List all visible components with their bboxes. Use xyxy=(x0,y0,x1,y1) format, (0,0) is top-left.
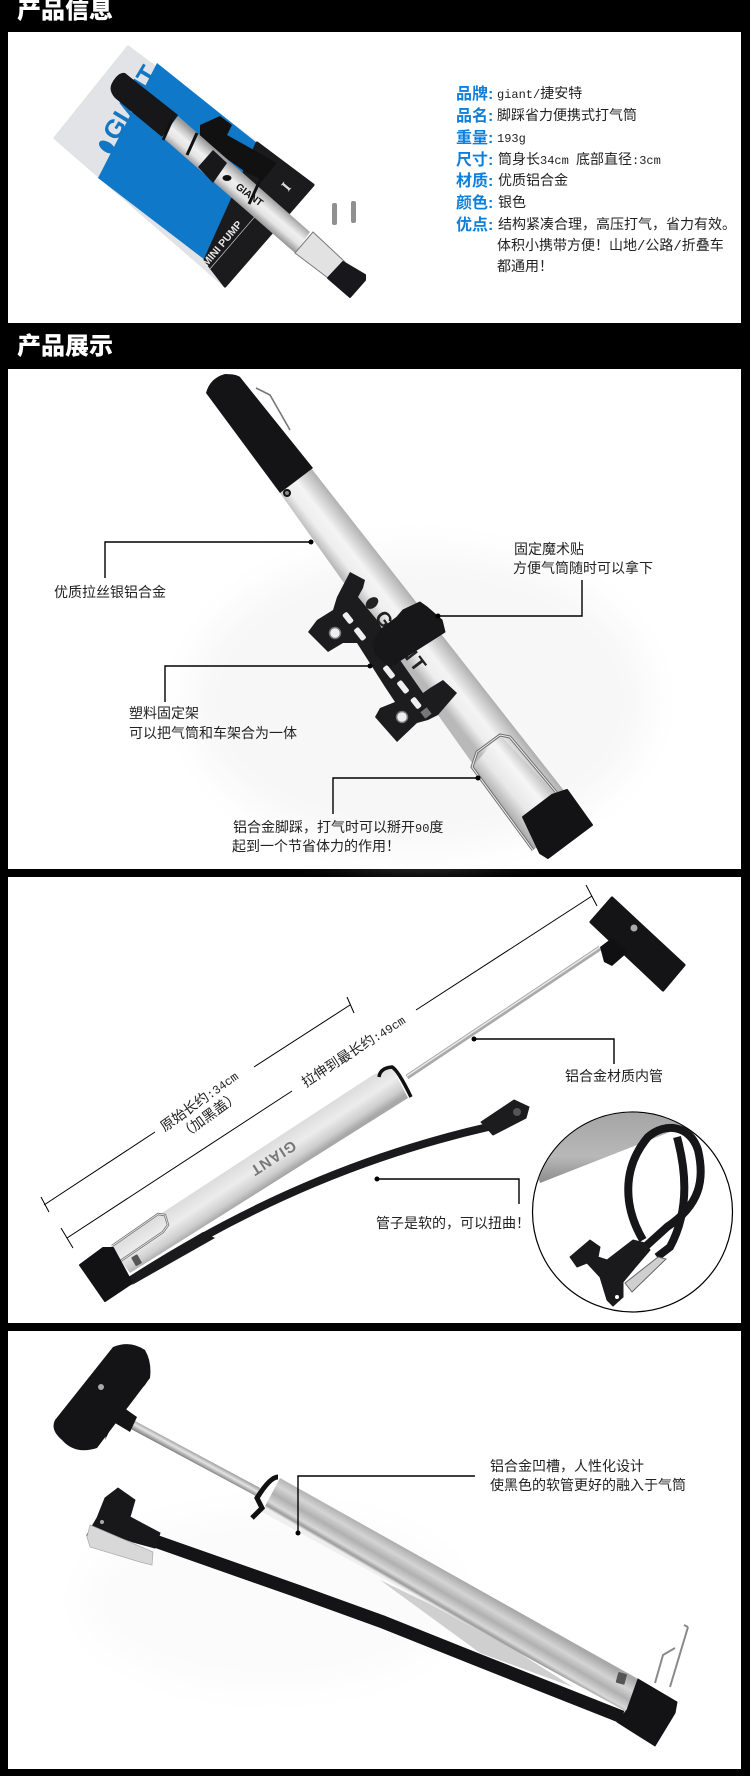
hose xyxy=(155,1541,622,1717)
product specs: 体积小携带方便！山地/公路/折叠车 xyxy=(497,237,724,255)
velcro strap xyxy=(373,602,445,667)
dimension: original length: 原始长约:34cm xyxy=(158,1068,242,1136)
callout: inner tube xyxy=(472,1036,663,1086)
product specs: 都通用！ xyxy=(497,259,553,276)
pump photo xyxy=(206,374,592,858)
callout: plastic bracket xyxy=(129,664,372,743)
card xyxy=(55,47,313,286)
product specs: 筒身长34cm 底部直径:3cm xyxy=(498,151,661,169)
nozzle xyxy=(87,1488,160,1565)
callout: aluminium groove: 使黑色的软管更好的融入于气筒 xyxy=(490,1477,686,1495)
callout: brushed aluminium xyxy=(54,540,314,602)
callout: aluminium groove: 铝合金凹槽，人性化设计 xyxy=(490,1459,644,1476)
dimension: extended length xyxy=(61,885,597,1248)
product specs: 材质: xyxy=(456,171,493,190)
pump: GIANT xyxy=(233,182,265,209)
product specs: 优点: xyxy=(456,215,493,234)
pump photo xyxy=(54,1344,688,1746)
groove strip xyxy=(380,1580,573,1687)
product specs: 结构紧凑合理，高压打气，省力有效。 xyxy=(498,216,736,234)
brand logo on tube xyxy=(363,595,381,611)
callout: foot pedal: 铝合金脚踩，打气时可以掰开90度 xyxy=(233,819,443,837)
callout: aluminium groove xyxy=(296,1459,686,1536)
hose xyxy=(128,1127,488,1282)
product specs: 优质铝合金 xyxy=(498,173,568,190)
hose nozzle xyxy=(481,1100,529,1135)
handle xyxy=(54,1344,150,1450)
callout: foot pedal xyxy=(232,776,480,856)
pump extended photo xyxy=(80,898,684,1301)
callout: soft hose: 管子是软的，可以扭曲！ xyxy=(376,1216,530,1233)
tube xyxy=(262,1478,640,1712)
product specs: 品名: xyxy=(456,107,493,125)
dimension: original length: （加黑盖） xyxy=(177,1089,243,1144)
inset: coiled hose circle xyxy=(530,1107,732,1312)
product specs: 重量: xyxy=(456,129,493,147)
product specs: 尺寸: xyxy=(456,150,493,169)
product specs: 银色 xyxy=(498,194,526,212)
product specs: 脚踩省力便携式打气筒 xyxy=(497,107,637,125)
dimension: extended length: 拉伸到最长约:49cm xyxy=(299,1012,409,1092)
handle xyxy=(591,898,684,990)
callout: velcro xyxy=(436,542,653,618)
packaged pump photo xyxy=(55,47,365,297)
foot wire xyxy=(100,1214,168,1275)
inner rod xyxy=(407,948,600,1077)
end cap xyxy=(617,1679,677,1746)
callout: velcro: 方便气筒随时可以拿下 xyxy=(513,560,653,578)
foot wire xyxy=(655,1625,688,1687)
callout: soft hose xyxy=(374,1176,530,1233)
panel: product info xyxy=(8,32,741,323)
callout: brushed aluminium: 优质拉丝银铝合金 xyxy=(54,585,166,602)
product specs: giant/捷安特 xyxy=(497,86,582,103)
pump photo: GIANT xyxy=(370,607,431,678)
dimension: original length xyxy=(41,997,354,1212)
callout: foot pedal: 起到一个节省体力的作用！ xyxy=(232,839,400,856)
card: MINI PUMP xyxy=(200,219,245,269)
pump extended photo: GIANT xyxy=(246,1137,299,1179)
callout: plastic bracket: 塑料固定架 xyxy=(129,706,199,723)
callout: plastic bracket: 可以把气筒和车架合为一体 xyxy=(129,725,297,743)
heading: product display: 产品展示 xyxy=(17,333,113,360)
card: I xyxy=(279,180,295,195)
panel: groove detail xyxy=(8,1331,741,1769)
callout: inner tube: 铝合金材质内管 xyxy=(565,1069,663,1086)
product specs: 品牌: xyxy=(456,84,493,103)
card: GIANT xyxy=(96,60,164,145)
panel: pump detail callouts xyxy=(8,369,741,869)
product specs: 193g xyxy=(497,132,526,146)
pump xyxy=(111,73,365,297)
product specs: 颜色: xyxy=(456,193,493,212)
rod xyxy=(133,1425,258,1492)
screws xyxy=(332,201,356,225)
bracket xyxy=(308,572,457,742)
end cap xyxy=(80,1248,132,1301)
panel: dimensions xyxy=(8,877,741,1323)
callout: velcro: 固定魔术贴 xyxy=(514,542,584,559)
product specs xyxy=(456,84,736,276)
